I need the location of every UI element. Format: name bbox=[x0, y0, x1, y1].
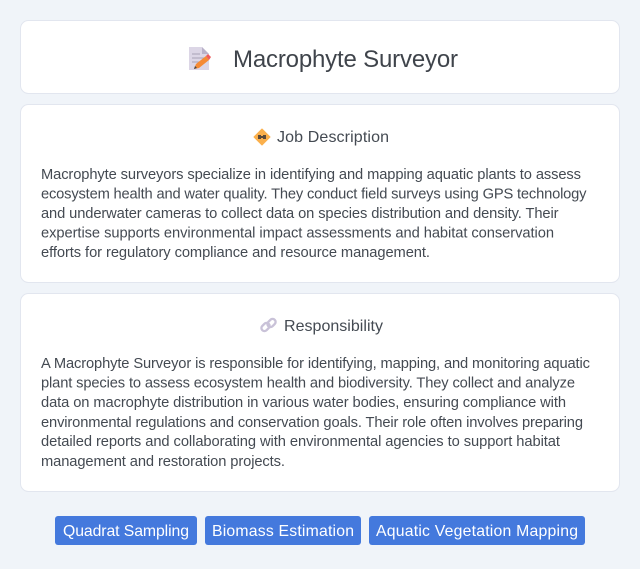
icon: orange diamond bbox=[254, 129, 270, 145]
text block: responsibility: plant species to assess ecosystem health and biodiversity. They collect and analyze bbox=[41, 376, 575, 392]
text block: responsibility: A Macrophyte Surveyor is responsible for identifying, mapping, and monitoring aquatic bbox=[41, 356, 590, 372]
panel: job description bbox=[20, 104, 620, 282]
tag: aquatic vegetation mapping bbox=[369, 516, 585, 545]
text block: responsibility: environmental regulations and conservation goals. Their role often involves preparing bbox=[41, 415, 583, 431]
icon: chain link bbox=[260, 318, 277, 332]
title: Macrophyte Surveyor bbox=[233, 46, 458, 73]
tag: biomass estimation bbox=[205, 516, 361, 545]
text block: job description: efforts for regulatory compliance and resource management. bbox=[41, 245, 430, 261]
text block: responsibility bbox=[41, 356, 590, 470]
text block: responsibility: data on macrophyte distribution in various water bodies, ensuring compliance with bbox=[41, 395, 566, 411]
text block: job description: Macrophyte surveyors specialize in identifying and mapping aquatic plants to assess bbox=[41, 167, 581, 183]
tag: quadrat sampling bbox=[55, 516, 197, 545]
icon: document with pencil bbox=[189, 47, 211, 70]
text block: job description: ecosystem health and water quality. They conduct field surveys using GPS technology bbox=[41, 186, 587, 202]
tag: quadrat sampling: Quadrat Sampling bbox=[63, 523, 189, 540]
text block: job description: and underwater cameras to collect data on species distribution and density. Their bbox=[41, 206, 559, 222]
text block: job description: expertise supports environmental impact assessments and habitat conservation bbox=[41, 226, 554, 242]
heading: responsibility: Responsibility bbox=[284, 318, 383, 335]
panel: responsibility bbox=[20, 294, 620, 492]
tag: biomass estimation: Biomass Estimation bbox=[212, 523, 354, 540]
text block: responsibility: detailed reports and collaborating with environmental agencies to support habitat bbox=[41, 434, 560, 450]
heading: job description: Job Description bbox=[277, 129, 389, 146]
tag: aquatic vegetation mapping: Aquatic Vegetation Mapping bbox=[376, 523, 578, 540]
panel: title header bbox=[20, 20, 620, 94]
text block: job description bbox=[41, 167, 587, 261]
text block: responsibility: management and restoration projects. bbox=[41, 454, 285, 470]
